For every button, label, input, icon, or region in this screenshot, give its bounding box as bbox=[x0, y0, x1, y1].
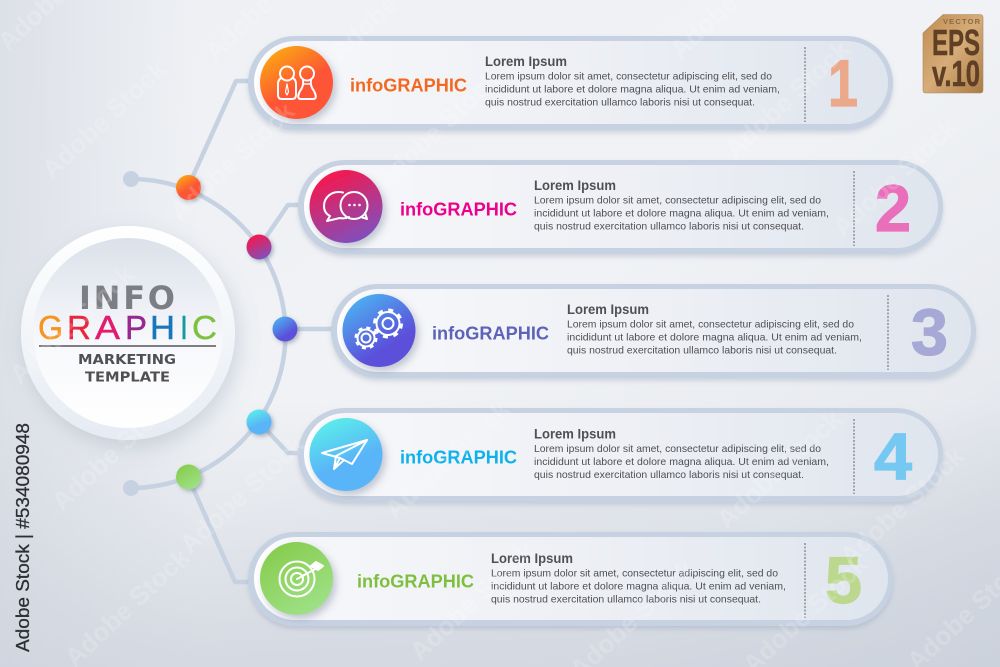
panel 4 bbox=[298, 408, 943, 502]
hub subtitle: TEMPLATE bbox=[85, 370, 170, 386]
infoGRAPHIC label 4: infoGRAPHIC bbox=[400, 448, 517, 468]
text block 2: Lorem Ipsum bbox=[534, 177, 616, 193]
watermark: Adobe Stock bbox=[46, 386, 183, 516]
hub subtitle bbox=[78, 352, 176, 386]
text block 5: Lorem Ipsum bbox=[491, 550, 573, 566]
text block 4 bbox=[534, 426, 829, 481]
watermark: Adobe Stock bbox=[174, 429, 311, 559]
text block 1: Lorem ipsum dolor sit amet, consectetur adipiscing elit, sed do bbox=[485, 72, 772, 82]
icon: gears bbox=[342, 294, 416, 367]
text block 1: quis nostrud exercitation ullamco laboris nisi ut consequat. bbox=[485, 98, 755, 108]
connector node 4 bbox=[246, 410, 272, 434]
watermark: Adobe Stock bbox=[164, 96, 301, 226]
hub title: GRAPHIC: C bbox=[192, 309, 217, 346]
text block 5: quis nostrud exercitation ullamco laboris nisi ut consequat. bbox=[491, 594, 761, 606]
EPS badge: VECTOR bbox=[943, 17, 981, 26]
icon: couple bbox=[260, 46, 333, 119]
hub subtitle: MARKETING bbox=[78, 352, 176, 368]
text block 5 bbox=[491, 550, 786, 606]
text block 2: Lorem ipsum dolor sit amet, consectetur adipiscing elit, sed do bbox=[534, 196, 821, 206]
text block 4: incididunt ut labore et dolore magna aliqua. Ut enim ad veniam, bbox=[534, 457, 829, 468]
watermark: Adobe Stock bbox=[379, 394, 516, 524]
text block 3: Lorem ipsum dolor sit amet, consectetur adipiscing elit, sed do bbox=[567, 320, 854, 330]
panel 2 bbox=[298, 160, 943, 254]
hub title: GRAPHIC: R bbox=[67, 309, 91, 346]
number 2: 2 bbox=[875, 171, 911, 245]
hub title: GRAPHIC: H bbox=[150, 309, 175, 346]
stock id text: Adobe Stock | #534080948 bbox=[12, 423, 33, 652]
text block 3: incididunt ut labore et dolore magna aliqua. Ut enim ad veniam, bbox=[567, 332, 862, 344]
icon: paper plane bbox=[310, 418, 382, 491]
infoGRAPHIC label 5: infoGRAPHIC bbox=[357, 572, 474, 592]
panel 5 bbox=[248, 532, 893, 626]
text block 1: incididunt ut labore et dolore magna aliqua. Ut enim ad veniam, bbox=[485, 84, 780, 96]
connector lines bbox=[123, 81, 335, 582]
hub title: GRAPHIC: A bbox=[95, 309, 120, 346]
text block 4: quis nostrud exercitation ullamco laboris nisi ut consequat. bbox=[534, 470, 804, 481]
text block 4: Lorem Ipsum bbox=[534, 426, 616, 442]
text block 2: quis nostrud exercitation ullamco laboris nisi ut consequat. bbox=[534, 222, 804, 232]
watermark: Adobe Stock bbox=[827, 112, 964, 242]
central hub bbox=[21, 226, 235, 440]
hub title: GRAPHIC: G bbox=[38, 309, 63, 346]
panel 3 bbox=[331, 284, 976, 378]
icon: chat bubbles bbox=[310, 170, 382, 243]
watermark: Adobe Stock bbox=[834, 441, 971, 571]
text block 3: quis nostrud exercitation ullamco laboris nisi ut consequat. bbox=[567, 346, 837, 356]
hub title: INFO: INFO bbox=[79, 279, 175, 317]
text block 4: Lorem ipsum dolor sit amet, consectetur adipiscing elit, sed do bbox=[534, 444, 821, 455]
connector node 1 bbox=[176, 175, 201, 200]
text block 5: Lorem ipsum dolor sit amet, consectetur adipiscing elit, sed do bbox=[491, 568, 778, 580]
number 3: 3 bbox=[911, 295, 948, 369]
EPS badge: v.10 bbox=[932, 53, 980, 94]
hub title: GRAPHIC: P bbox=[125, 309, 147, 346]
hub title: GRAPHIC bbox=[38, 309, 217, 346]
text block 3: Lorem Ipsum bbox=[567, 301, 649, 317]
infoGRAPHIC label 1: infoGRAPHIC bbox=[350, 76, 467, 96]
text block 3 bbox=[567, 301, 862, 356]
text block 5: incididunt ut labore et dolore magna aliqua. Ut enim ad veniam, bbox=[491, 582, 786, 592]
text block 1: Lorem Ipsum bbox=[485, 53, 567, 69]
watermark: Adobe Stock bbox=[404, 536, 541, 666]
watermark: Adobe Stock bbox=[4, 259, 141, 389]
text block 2 bbox=[534, 177, 829, 232]
connector node 3 bbox=[272, 316, 298, 342]
number 4: 4 bbox=[874, 419, 912, 493]
number 5: 5 bbox=[825, 543, 862, 617]
connector node 5 bbox=[176, 464, 201, 490]
watermark: Adobe Stock bbox=[36, 54, 173, 184]
number 1: 1 bbox=[828, 46, 858, 120]
hub divider bbox=[39, 345, 216, 347]
watermark: Adobe Stock bbox=[369, 64, 506, 194]
watermark: Adobe Stock bbox=[719, 34, 856, 164]
text block 1 bbox=[485, 53, 780, 108]
icon: target bbox=[260, 542, 333, 615]
hub title: GRAPHIC: I bbox=[180, 309, 188, 346]
infoGRAPHIC label 2: infoGRAPHIC bbox=[400, 200, 517, 220]
infoGRAPHIC label 3: infoGRAPHIC bbox=[432, 324, 549, 344]
watermark: Adobe Stock bbox=[711, 404, 848, 534]
EPS badge bbox=[923, 14, 983, 94]
text block 2: incididunt ut labore et dolore magna aliqua. Ut enim ad veniam, bbox=[534, 208, 829, 220]
connector node 2 bbox=[246, 234, 272, 260]
panel 1 bbox=[248, 36, 893, 130]
